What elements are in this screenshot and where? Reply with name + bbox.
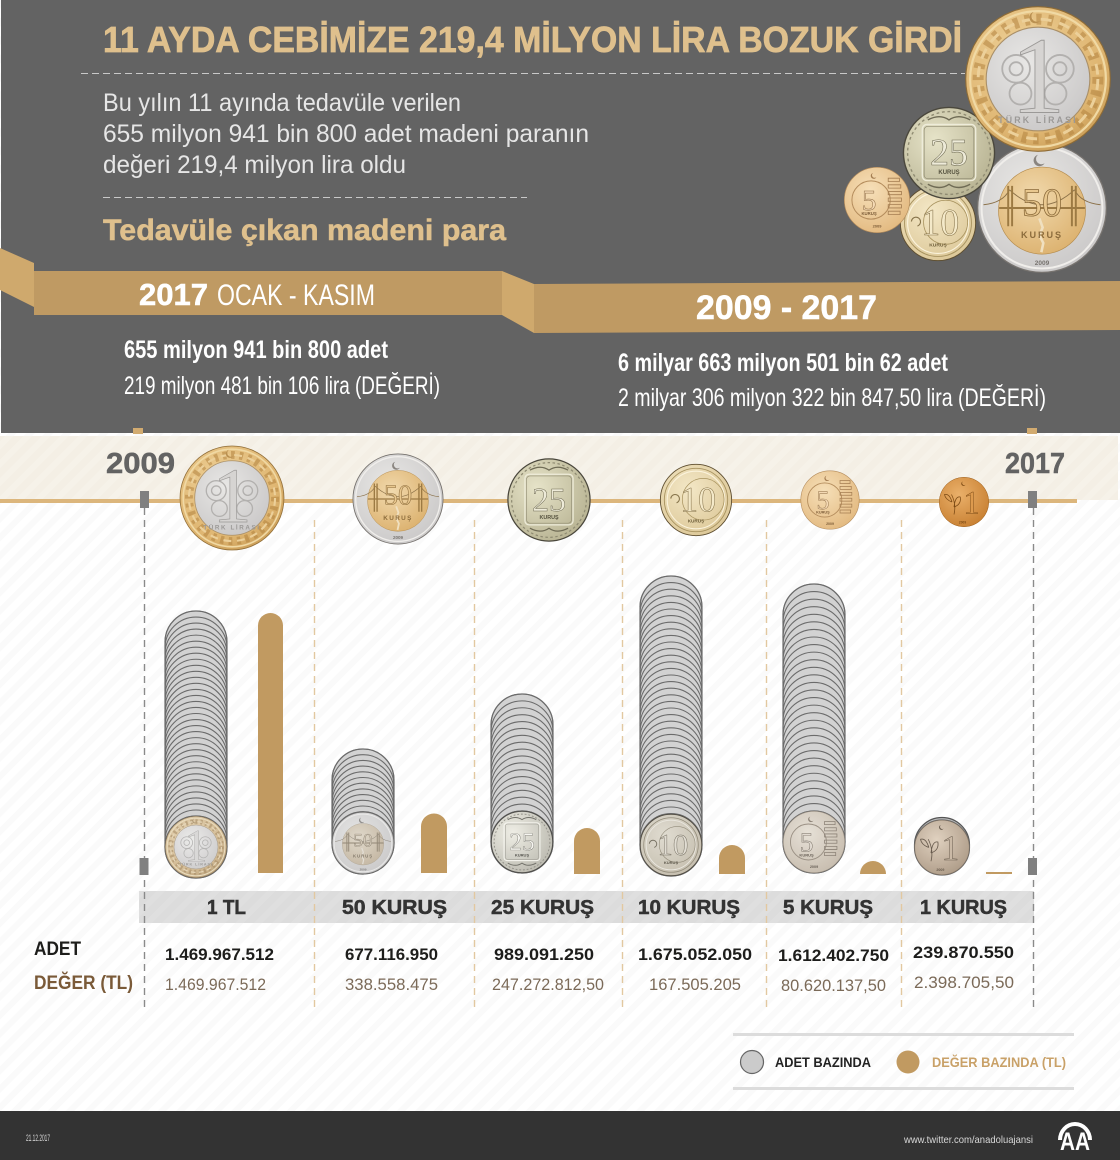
row: adet values (165, 943, 1014, 965)
row: değer values: 167.505.205 (649, 975, 741, 994)
stats: 2009-2017: 6 milyar 663 milyon 501 bin 62 adet (618, 349, 949, 377)
year label: 2009: 2009 (106, 448, 175, 480)
ribbon (0, 248, 1120, 333)
row: değer values: 80.620.137,50 (781, 976, 886, 995)
label: 25 kuruş: 25 KURUŞ (491, 897, 594, 919)
label: 10 kuruş: 10 KURUŞ (638, 897, 740, 919)
row: değer values: 247.272.812,50 (492, 975, 604, 994)
title: 11 AYDA CEBİMİZE 219,4 MİLYON LİRA BOZUK GİRDİ (103, 19, 962, 60)
footer (0, 1111, 1120, 1160)
bar: 5 kuruş value (860, 861, 886, 874)
coin row (180, 446, 989, 550)
row: adet values: 1.469.967.512 (165, 945, 274, 964)
axis ticks (140, 491, 1037, 875)
stack: 1 kuruş count (914, 818, 970, 875)
coin: 1 TL (180, 446, 284, 550)
period label: 2009-2017: 2009 - 2017 (696, 289, 877, 327)
date: 21.12.2017 (26, 1133, 50, 1143)
bar: 1 kuruş value (986, 872, 1012, 874)
period label: 2017: OCAK - KASIM (217, 279, 375, 312)
year label: 2017: 2017 (1005, 448, 1065, 480)
timeline band (0, 428, 1118, 503)
period label: 2017: 2017 (139, 277, 208, 312)
legend item: değer (896, 1050, 1066, 1074)
panel: dark header (0, 0, 1120, 433)
row: değer values (165, 973, 1014, 995)
stack: 1 TL count (165, 611, 227, 878)
legend item: değer: DEĞER BAZINDA (TL) (932, 1053, 1066, 1070)
stats: 2017 (124, 336, 440, 400)
bar: 25 kuruş value (574, 828, 600, 874)
stats: 2009-2017 (618, 349, 1046, 412)
row label: adet: ADET (34, 939, 81, 960)
row: değer values: 1.469.967.512 (165, 975, 266, 994)
legend item: adet: ADET BAZINDA (775, 1054, 871, 1070)
row: adet values: 677.116.950 (345, 945, 438, 964)
legend item: adet (740, 1050, 871, 1074)
coin: 25 kuruş (508, 459, 590, 541)
row: değer values: 2.398.705,50 (914, 973, 1014, 992)
label: 1 TL: 1 TL (207, 897, 246, 919)
logo: AA: AA (1060, 1128, 1090, 1156)
coin: 50 kuruş (353, 454, 443, 544)
coin: 1 kuruş (939, 477, 989, 527)
row: değer values: 338.558.475 (345, 975, 438, 994)
stats: 2017: 655 milyon 941 bin 800 adet (124, 336, 389, 364)
label: 5 kuruş: 5 KURUŞ (783, 897, 873, 919)
category band background (139, 891, 1034, 923)
label: 1 kuruş: 1 KURUŞ (920, 897, 1007, 919)
period label: 2017 (139, 277, 375, 312)
stack: 25 kuruş count (491, 694, 553, 873)
intro text (103, 89, 589, 179)
subheading: Tedavüle çıkan madeni para (103, 214, 506, 247)
row: adet values: 989.091.250 (494, 945, 594, 964)
bar: 1 TL value (258, 613, 283, 873)
column dividers (144, 508, 1034, 1010)
row label: değer: DEĞER (TL) (34, 972, 133, 994)
row: adet values: 239.870.550 (913, 943, 1014, 962)
bar: 10 kuruş value (719, 845, 745, 874)
legend (733, 1033, 1074, 1090)
stack: 50 kuruş count (332, 749, 394, 874)
twitter url: www.twitter.com/anadoluajansi (903, 1134, 1033, 1146)
intro text: 655 milyon 941 bin 800 adet madeni paranın (103, 120, 589, 148)
row: adet values: 1.675.052.050 (638, 945, 752, 964)
coin cluster (844, 7, 1110, 272)
stats: 2017: 219 milyon 481 bin 106 lira (DEĞERİ) (124, 371, 440, 400)
row: adet values: 1.612.402.750 (778, 946, 889, 965)
category labels (207, 897, 1007, 919)
label: 50 kuruş: 50 KURUŞ (342, 897, 447, 919)
stack: 10 kuruş count (640, 576, 702, 876)
coin: 5 kuruş (801, 471, 859, 529)
intro text: değeri 219,4 milyon lira oldu (103, 151, 406, 179)
intro text: Bu yılın 11 ayında tedavüle verilen (103, 89, 461, 117)
chart: coin stacks and value bars (165, 576, 1012, 878)
stack: 5 kuruş count (783, 584, 845, 873)
coin: 10 kuruş (660, 464, 732, 536)
bar: 50 kuruş value (421, 814, 447, 873)
